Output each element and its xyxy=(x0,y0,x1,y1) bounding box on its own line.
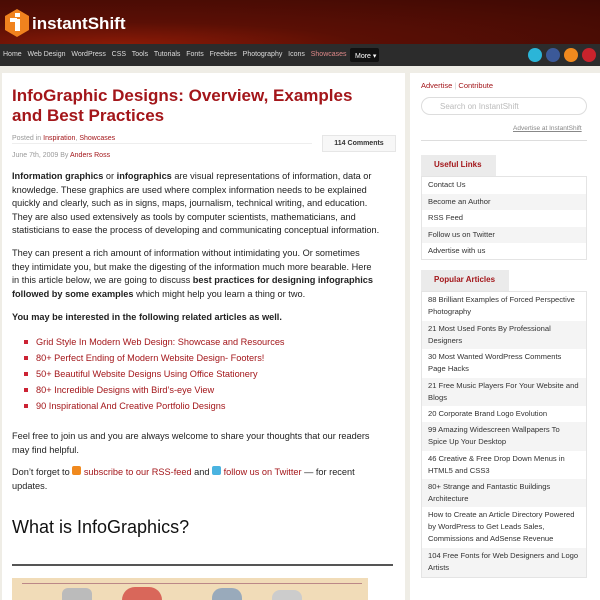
paragraph 1 xyxy=(12,171,379,235)
title: and Best Practices xyxy=(12,106,164,125)
popular articles list: 99 Amazing Widescreen Wallpapers To Spice Up Your Desktop xyxy=(428,425,560,446)
popular articles list: 46 Creative & Free Drop Down Menus in HTML5 and CSS3 xyxy=(428,454,565,475)
popular articles tab: Popular Articles xyxy=(434,275,495,284)
popular articles tab xyxy=(421,270,509,291)
related list: 80+ Perfect Ending of Modern Website Design- Footers! xyxy=(36,353,264,363)
useful links list: Advertise with us xyxy=(428,246,485,255)
useful links list: Contact Us xyxy=(428,180,466,189)
useful links list: Become an Author xyxy=(428,196,490,206)
advertise link: Advertise at InstantShift xyxy=(513,125,582,132)
paragraph 2 xyxy=(12,248,373,299)
sidebar top links: Advertise | Contribute xyxy=(421,81,493,90)
infographic image xyxy=(12,578,368,600)
paragraph 1: Information graphics or infographics are visual representations of information, data or xyxy=(12,171,371,181)
paragraph 2: they intimidate you, but make the digesting of the information much more bearable. Here xyxy=(12,262,372,272)
popular articles list: 80+ Strange and Fantastic Buildings Architecture xyxy=(428,482,550,503)
title xyxy=(12,86,352,125)
paragraph 4 with icons: updates. xyxy=(12,480,47,490)
paragraph 3: Feel free to join us and you are always welcome to share your thoughts that our readers xyxy=(12,431,370,441)
nav bar: Home Web Design WordPress CSS Tools Tutorials Fonts Freebies Photography Icons Showcases xyxy=(3,51,347,58)
useful links tab: Useful Links xyxy=(434,160,482,169)
useful links tab xyxy=(421,155,496,176)
popular articles list: How to Create an Article Directory Powered by WordPress to Get Leads Sales, Commissions and AdSense Revenue xyxy=(428,510,574,543)
logo icon xyxy=(5,9,29,37)
meta: June 7th, 2009 By Anders Ross xyxy=(12,152,110,159)
popular articles list: 30 Most Wanted WordPress Comments Page Hacks xyxy=(428,352,561,373)
popular articles list: 88 Brilliant Examples of Forced Perspective Photography xyxy=(428,295,575,316)
paragraph 1: statisticians to ease the process of developing and communicating conceptual information. xyxy=(12,225,379,235)
comments button xyxy=(322,135,396,152)
paragraph 2: They can present a rich amount of information without intimidating you. Or sometimes xyxy=(12,248,360,258)
paragraph 4 with icons: Don’t forget to subscribe to our RSS-feed and follow us on Twitter — for recent xyxy=(12,467,355,477)
main content panel xyxy=(2,73,405,600)
paragraph 1: They are also used extensively as tools by computer scientists, mathematicians, and xyxy=(12,212,356,222)
useful links list: Follow us on Twitter xyxy=(428,230,495,238)
popular articles list: 20 Corporate Brand Logo Evolution xyxy=(428,409,547,418)
popular articles list: 21 Free Music Players For Your Website and Blogs xyxy=(428,381,579,402)
title: InfoGraphic Designs: Overview, Examples xyxy=(12,86,352,105)
paragraph 1: quickly and clearly, such as in signs, maps, journalism, technical writing, and education. xyxy=(12,198,367,208)
sidebar panel xyxy=(410,73,600,600)
paragraph 1: knowledge. These graphics are used where complex information needs to be explained xyxy=(12,184,367,194)
related list xyxy=(24,337,285,411)
popular articles list: 104 Free Fonts for Web Designers and Logo Artists xyxy=(428,551,578,572)
nav bar xyxy=(0,44,600,66)
meta: Posted in Inspiration, Showcases xyxy=(12,135,115,142)
paragraph 3 xyxy=(12,431,370,455)
related list: Grid Style In Modern Web Design: Showcase and Resources xyxy=(36,337,285,347)
popular articles list xyxy=(421,291,587,578)
comments button: 114 Comments xyxy=(334,140,384,147)
related list: 50+ Beautiful Website Designs Using Office Stationery xyxy=(36,369,258,379)
search box: Search on InstantShift xyxy=(440,102,519,111)
social icons xyxy=(528,48,596,62)
related list: 90 Inspirational And Creative Portfolio Designs xyxy=(36,401,225,411)
header xyxy=(0,0,600,44)
paragraph 4 with icons xyxy=(12,466,355,491)
more button: More ▾ xyxy=(355,53,376,60)
useful links list xyxy=(421,176,587,260)
meta xyxy=(12,134,115,159)
section heading: What is InfoGraphics? xyxy=(12,517,189,537)
logo text: instantShift xyxy=(32,14,126,33)
paragraph 2: in this article below, we are going to discuss best practices for designing infographics xyxy=(12,275,373,285)
useful links list: RSS Feed xyxy=(428,213,463,222)
more button xyxy=(350,48,379,62)
paragraph 2: followed by some examples which might help you learn a thing or two. xyxy=(12,288,305,298)
popular articles list: 21 Most Used Fonts By Professional Designers xyxy=(428,324,551,345)
paragraph 3: may find helpful. xyxy=(12,444,79,454)
related list: 80+ Incredible Designs with Bird’s-eye View xyxy=(36,385,214,395)
related heading: You may be interested in the following related articles as well. xyxy=(12,312,282,322)
search box xyxy=(421,97,587,115)
